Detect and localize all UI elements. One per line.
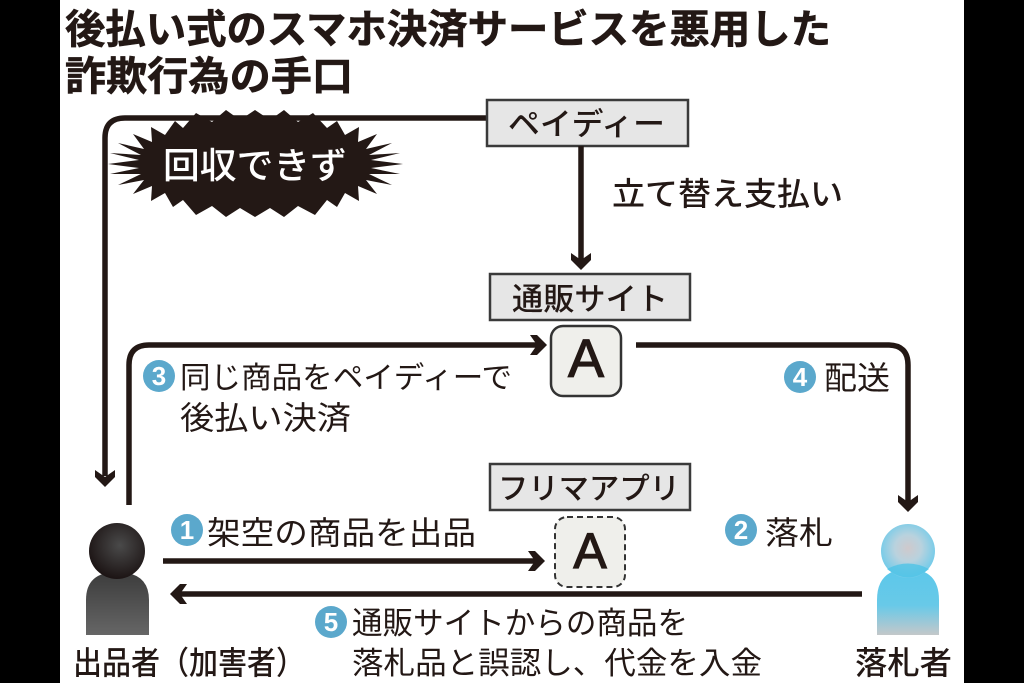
step 4 text: 4 xyxy=(793,362,808,392)
box: flea market app xyxy=(490,464,690,510)
box: product A on mail-order site xyxy=(551,326,621,396)
icon: bidder figure xyxy=(877,524,939,635)
title: 後払い式のスマホ決済サービスを悪用した xyxy=(65,8,831,52)
step 3 text: 3 xyxy=(152,361,166,391)
step 1 text: 架空の商品を出品 xyxy=(207,515,476,551)
box: Paidy xyxy=(487,100,688,146)
step 5 text: 5 xyxy=(324,607,338,637)
step 4 text: 配送 xyxy=(824,360,890,396)
step 3 text xyxy=(143,360,512,436)
box: product A on flea market app xyxy=(555,517,625,587)
box: mail-order site: 通販サイト xyxy=(512,282,668,317)
box: flea market app: フリマアプリ xyxy=(498,473,680,506)
label: bidder: 落札者 xyxy=(855,645,952,681)
step 1 text: 1 xyxy=(180,515,194,545)
arrowhead: toward seller xyxy=(95,470,115,487)
icon: seller figure xyxy=(86,523,149,635)
step 5 text: 通販サイトからの商品を xyxy=(352,606,688,641)
step 2 text xyxy=(725,514,833,551)
burst: 回収できず xyxy=(108,110,403,217)
box: Paidy: ペイディー xyxy=(508,107,665,142)
box: mail-order site xyxy=(490,274,690,320)
step 2 text: 2 xyxy=(734,515,748,545)
arrow: listing to product A xyxy=(163,551,545,571)
label: reimbursement: 立て替え支払い xyxy=(612,176,843,212)
arrow: bidder to seller xyxy=(170,584,862,604)
title xyxy=(65,8,831,99)
step 2 text: 落札 xyxy=(765,515,833,551)
label: seller: 出品者（加害者） xyxy=(73,645,305,681)
step 3 text: 同じ商品をペイディーで xyxy=(180,362,512,395)
step 5 text: 落札品と誤認し、代金を入金 xyxy=(352,646,762,681)
box: product A on mail-order site: A xyxy=(568,329,604,389)
arrow: delivery to bidder xyxy=(636,345,918,512)
arrow: Paidy to mail-order site xyxy=(571,146,591,270)
box: product A on flea market app: A xyxy=(573,523,607,579)
arrow: seller to mail-order site xyxy=(129,335,547,505)
step 3 text: 後払い決済 xyxy=(180,400,351,436)
arrow: Paidy back to seller xyxy=(105,118,487,476)
title: 詐欺行為の手口 xyxy=(65,55,353,99)
burst: 回収できず: 回収できず xyxy=(163,145,347,186)
step 4 text xyxy=(784,360,890,396)
step 5 text xyxy=(315,606,762,681)
